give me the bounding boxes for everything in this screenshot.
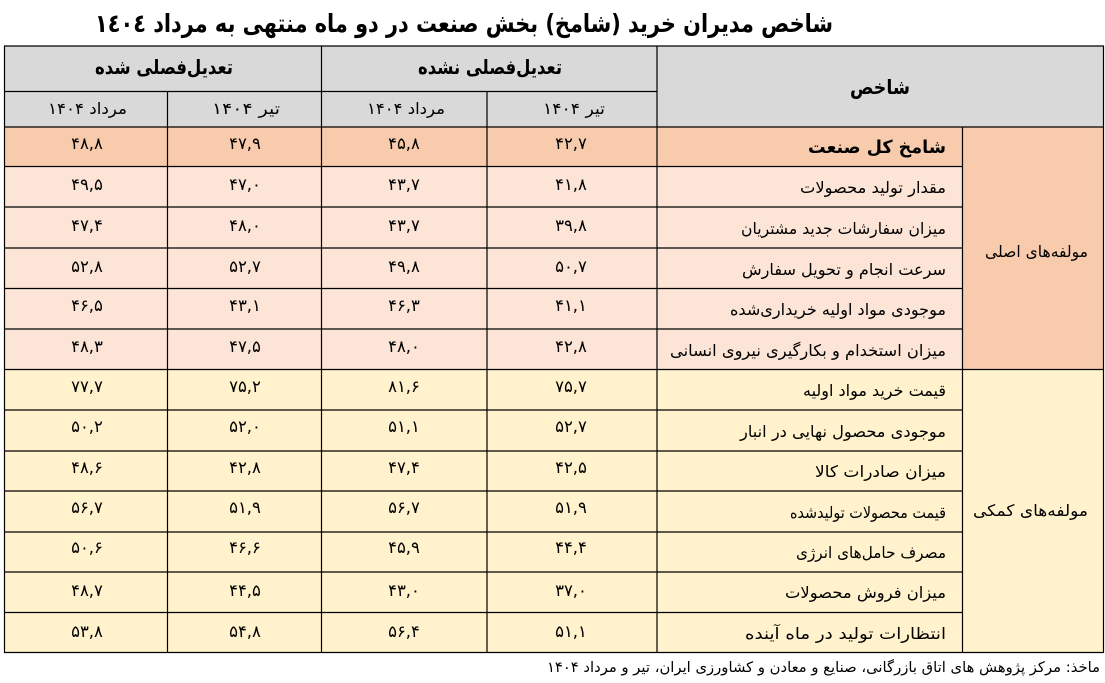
row labels: قیمت خرید مواد اولیه [803, 381, 946, 401]
heading: not seasonally adjusted: تعدیل‌فصلی نشده [418, 55, 562, 79]
panel: main components rows [4, 127, 1104, 370]
values: seasonally adjusted, Tir: ۵۲,۰ [229, 417, 261, 436]
values: seasonally adjusted, Mordad: ۴۸,۸ [71, 134, 103, 153]
source note: ماخذ: مرکز پژوهش های اتاق بازرگانی، صنایع و معادن و کشاورزی ایران، تیر و مرداد ۱۴۰۴ [547, 659, 1100, 676]
values: not adjusted, Mordad [388, 134, 420, 641]
row labels: مقدار تولید محصولات [800, 178, 946, 198]
row labels: میزان صادرات کالا [815, 462, 946, 482]
values: not adjusted, Tir: ۳۷,۰ [555, 581, 587, 600]
values: not adjusted, Mordad: ۴۶,۳ [388, 296, 420, 315]
values: seasonally adjusted, Tir: ۵۲,۷ [229, 257, 261, 276]
values: seasonally adjusted, Tir: ۴۲,۸ [229, 458, 261, 477]
values: seasonally adjusted, Tir: ۵۴,۸ [229, 622, 261, 641]
values: seasonally adjusted, Mordad: ۴۹,۵ [71, 175, 103, 194]
values: not adjusted, Mordad: ۵۶,۷ [388, 498, 420, 517]
month headers: تیر ۱۴۰۴ [543, 99, 605, 119]
values: seasonally adjusted, Mordad: ۴۶,۵ [71, 296, 103, 315]
values: seasonally adjusted, Tir: ۵۱,۹ [229, 498, 261, 517]
values: seasonally adjusted, Tir [229, 134, 261, 641]
values: not adjusted, Mordad: ۴۳,۷ [388, 216, 420, 235]
values: seasonally adjusted, Mordad: ۵۰,۶ [71, 538, 103, 557]
values: seasonally adjusted, Tir: ۴۷,۹ [229, 134, 261, 153]
row labels: موجودی مواد اولیه خریداری‌شده [730, 300, 946, 320]
row labels: شامخ کل صنعت [808, 137, 946, 158]
values: not adjusted, Mordad: ۴۳,۷ [388, 175, 420, 194]
values: not adjusted, Tir: ۴۴,۴ [555, 538, 587, 557]
panel: auxiliary components rows [4, 370, 1104, 653]
group label: auxiliary components: مولفه‌های کمکی [973, 501, 1088, 521]
row labels: سرعت انجام و تحویل سفارش [742, 260, 946, 280]
values: seasonally adjusted, Tir: ۴۸,۰ [229, 216, 261, 235]
values: seasonally adjusted, Mordad: ۵۰,۲ [71, 417, 103, 436]
month headers: تیر ۱۴۰۴ [212, 99, 280, 119]
values: seasonally adjusted, Mordad: ۷۷,۷ [71, 377, 103, 396]
values: seasonally adjusted, Tir: ۷۵,۲ [229, 377, 261, 396]
month headers [48, 99, 605, 119]
row labels: موجودی محصول نهایی در انبار [739, 422, 946, 442]
values: seasonally adjusted, Tir: ۴۳,۱ [229, 296, 261, 315]
values: seasonally adjusted, Mordad: ۴۷,۴ [71, 216, 103, 235]
row labels: میزان سفارشات جدید مشتریان [741, 219, 946, 239]
values: seasonally adjusted, Mordad: ۵۶,۷ [71, 498, 103, 517]
values: seasonally adjusted, Tir: ۴۶,۶ [229, 538, 261, 557]
values: not adjusted, Mordad: ۴۳,۰ [388, 581, 420, 600]
values: seasonally adjusted, Mordad: ۴۸,۷ [71, 581, 103, 600]
values: not adjusted, Tir: ۷۵,۷ [555, 377, 587, 396]
row labels: قیمت محصولات تولیدشده [790, 503, 946, 523]
values: not adjusted, Mordad: ۴۹,۸ [388, 257, 420, 276]
values: seasonally adjusted, Tir: ۴۷,۰ [229, 175, 261, 194]
row labels: انتظارات تولید در ماه آینده [745, 624, 946, 644]
month headers: مرداد ۱۴۰۴ [367, 99, 445, 119]
values: not adjusted, Mordad: ۴۸,۰ [388, 337, 420, 356]
values: seasonally adjusted, Mordad: ۵۳,۸ [71, 622, 103, 641]
values: not adjusted, Mordad: ۵۶,۴ [388, 622, 420, 641]
values: not adjusted, Tir: ۴۲,۸ [555, 337, 587, 356]
heading: index column: شاخص [850, 75, 910, 99]
values: seasonally adjusted, Mordad: ۵۲,۸ [71, 257, 103, 276]
values: not adjusted, Tir: ۵۱,۱ [555, 622, 587, 641]
values: not adjusted, Tir [555, 134, 587, 641]
values: seasonally adjusted, Tir: ۴۷,۵ [229, 337, 261, 356]
values: not adjusted, Tir: ۴۱,۱ [555, 296, 587, 315]
values: seasonally adjusted, Tir: ۴۴,۵ [229, 581, 261, 600]
group label: main components: مولفه‌های اصلی [985, 242, 1088, 262]
month headers: مرداد ۱۴۰۴ [48, 99, 127, 119]
values: not adjusted, Mordad: ۸۱,۶ [388, 377, 420, 396]
values: not adjusted, Tir: ۵۱,۹ [555, 498, 587, 517]
values: not adjusted, Tir: ۴۱,۸ [555, 175, 587, 194]
title: شاخص مدیران خرید (شامخ) بخش صنعت در دو ماه منتهی به مرداد ١٤٠٤ [95, 9, 833, 39]
values: not adjusted, Mordad: ۴۵,۸ [388, 134, 420, 153]
row labels [670, 137, 946, 644]
header band [4, 46, 1104, 127]
values: not adjusted, Tir: ۴۲,۷ [555, 134, 587, 153]
heading: seasonally adjusted: تعدیل‌فصلی شده [95, 55, 233, 79]
values: seasonally adjusted, Mordad: ۴۸,۶ [71, 458, 103, 477]
values: not adjusted, Tir: ۴۲,۵ [555, 458, 587, 477]
row labels: مصرف حامل‌های انرژی [796, 543, 946, 563]
row labels: میزان فروش محصولات [785, 583, 946, 603]
values: not adjusted, Mordad: ۴۷,۴ [388, 458, 420, 477]
values: not adjusted, Tir: ۳۹,۸ [555, 216, 587, 235]
values: not adjusted, Tir: ۵۲,۷ [555, 417, 587, 436]
values: not adjusted, Tir: ۵۰,۷ [555, 257, 587, 276]
values: not adjusted, Mordad: ۵۱,۱ [388, 417, 420, 436]
values: not adjusted, Mordad: ۴۵,۹ [388, 538, 420, 557]
row labels: میزان استخدام و بکارگیری نیروی انسانی [670, 341, 946, 361]
values: seasonally adjusted, Mordad: ۴۸,۳ [71, 337, 103, 356]
values: seasonally adjusted, Mordad [71, 134, 103, 641]
